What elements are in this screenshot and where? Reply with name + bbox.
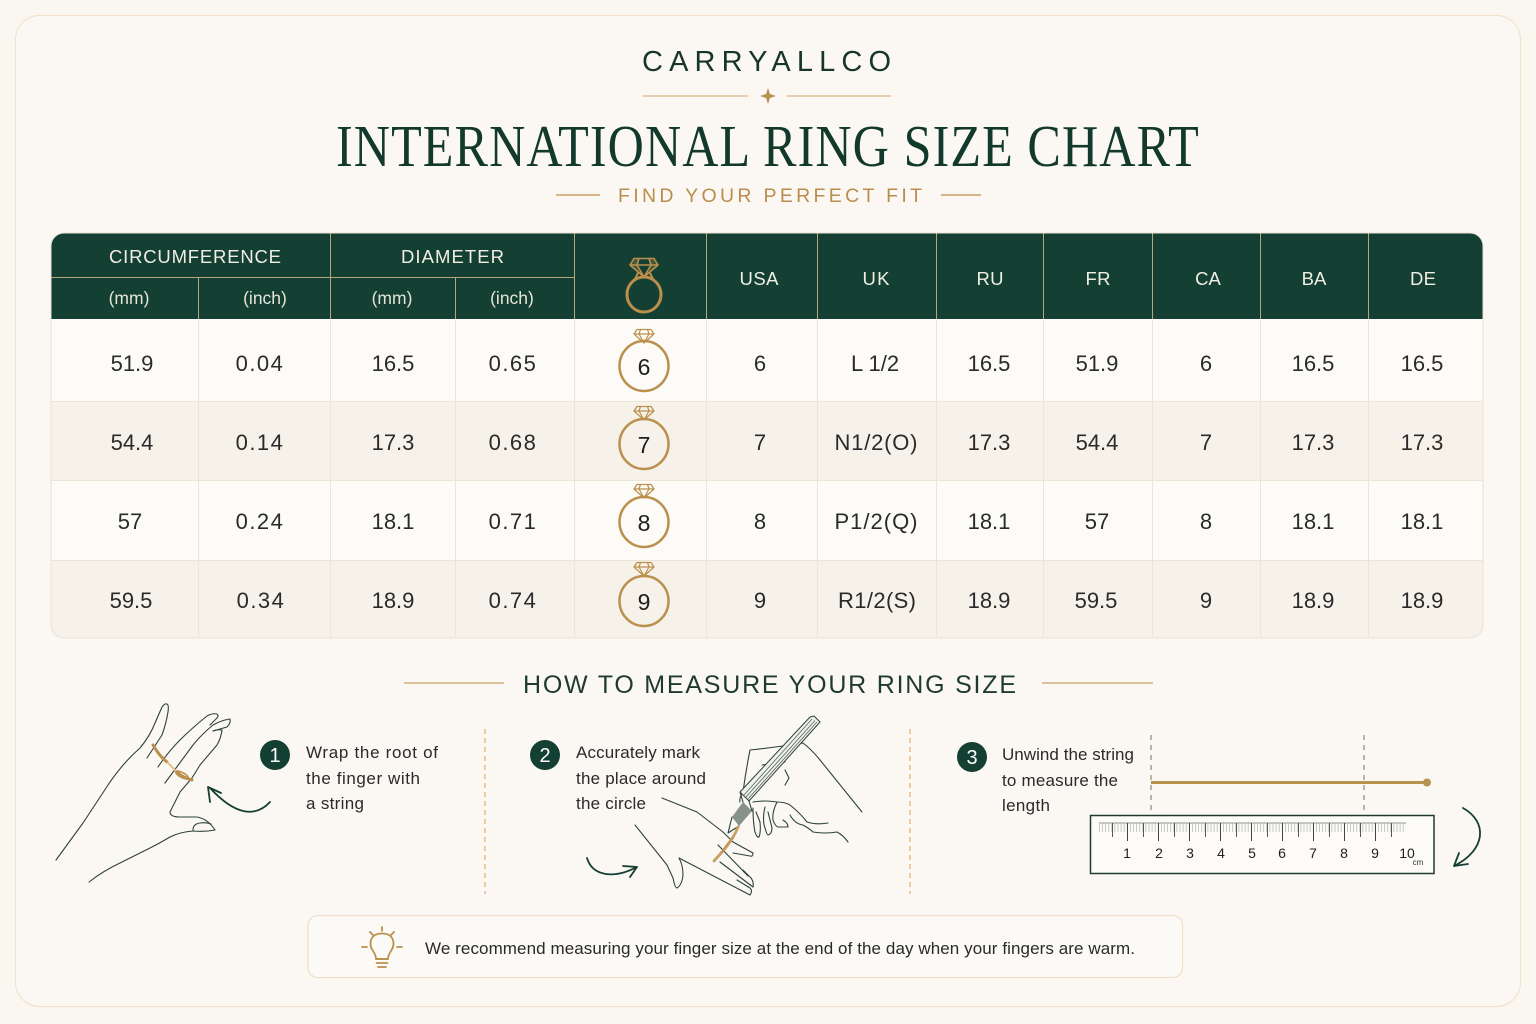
row: size 9: 59.5	[110, 588, 152, 613]
row: size 6: 51.9	[111, 351, 153, 376]
row: size 9: 59.5	[1075, 588, 1117, 613]
table header labels	[109, 246, 1436, 308]
icon: ring size 9	[620, 562, 668, 626]
step text 3: length	[1002, 796, 1050, 815]
table header labels: DIAMETER	[401, 246, 504, 267]
unwound string	[1151, 778, 1431, 786]
table header labels: CA	[1195, 268, 1222, 289]
icon: ring size 7: 7	[638, 432, 650, 458]
step number 1: 1	[269, 745, 281, 767]
row: size 7: 17.3	[968, 430, 1010, 455]
subtitle: FIND YOUR PERFECT FIT	[618, 185, 922, 207]
ruler: 3	[1186, 845, 1194, 861]
arrow: curved down to ruler	[1454, 808, 1480, 866]
arrow: pointing at hand	[587, 858, 637, 877]
ruler: 9	[1371, 845, 1379, 861]
step text 2: the circle	[576, 794, 646, 813]
step 3: measure the length	[957, 735, 1480, 874]
table header labels: BA	[1302, 268, 1327, 289]
step text 1: the finger with	[306, 769, 420, 788]
illustration: hands with pencil	[635, 716, 862, 895]
row: size 8: P1/2(Q)	[834, 509, 918, 534]
step 1: wrap the finger	[56, 704, 438, 882]
row: size 6: 16.5	[372, 351, 414, 376]
step text 3: Unwind the string	[1002, 745, 1134, 764]
icon: ring size 6: 6	[638, 354, 650, 380]
illustration: hand with string	[56, 704, 230, 882]
step number 1	[260, 740, 290, 770]
row: size 6: L 1/2	[851, 351, 899, 376]
divider: step 2 and 3	[909, 729, 911, 894]
row: size 6: 16.5	[1401, 351, 1443, 376]
row: size 8: 18.1	[1401, 509, 1443, 534]
icon: header ring	[627, 258, 661, 312]
row: size 8: 8	[1200, 509, 1212, 534]
step text 2: Accurately mark	[576, 743, 700, 762]
row: size 6: 6	[754, 351, 766, 376]
row: size 9: 0.34	[237, 588, 285, 613]
ruler: cm	[1413, 858, 1424, 867]
row: size 9: 0.74	[489, 588, 537, 613]
icon: ring size 8: 8	[638, 510, 650, 536]
step text 2: the place around	[576, 769, 706, 788]
table header labels: (mm)	[109, 288, 149, 308]
icon: ring size 9: 9	[638, 589, 650, 615]
row: size 6	[111, 330, 1443, 391]
row: size 7: N1/2(O)	[834, 430, 918, 455]
row: size 9: 18.9	[968, 588, 1010, 613]
row: size 9: R1/2(S)	[838, 588, 916, 613]
icon: ring size 6	[620, 330, 668, 391]
row: size 9	[110, 562, 1443, 626]
ruler: 6	[1278, 845, 1286, 861]
row: size 7: 0.14	[236, 430, 284, 455]
step text 1: Wrap the root of	[306, 743, 438, 762]
section heading: how to measure: HOW TO MEASURE YOUR RING SIZE	[523, 671, 1016, 699]
row: size 6: 6	[1200, 351, 1212, 376]
row: size 6: 0.65	[489, 351, 537, 376]
row: size 6: 16.5	[1292, 351, 1334, 376]
row: size 6: 0.04	[236, 351, 284, 376]
table header labels: (inch)	[243, 288, 287, 308]
measurement guides	[1151, 735, 1364, 815]
row: size 9: 18.9	[372, 588, 414, 613]
table header labels: UK	[862, 268, 890, 289]
step number 2: 2	[539, 745, 551, 767]
ruler: 4	[1217, 845, 1225, 861]
row: size 9: 18.9	[1292, 588, 1334, 613]
icon: light bulb	[362, 927, 402, 967]
row: size 9: 9	[754, 588, 766, 613]
title: INTERNATIONAL RING SIZE CHART	[336, 113, 1199, 179]
row: size 8	[118, 484, 1443, 547]
row: size 7: 54.4	[1076, 430, 1118, 455]
row: size 7: 17.3	[1292, 430, 1334, 455]
row: size 8: 18.1	[1292, 509, 1334, 534]
table row backgrounds	[51, 233, 1483, 638]
step number 3: 3	[966, 747, 978, 769]
icon: ring size 8	[620, 484, 668, 547]
row: size 7: 0.68	[489, 430, 537, 455]
divider: step 1 and 2	[484, 729, 486, 894]
ruler: 8	[1340, 845, 1348, 861]
row: size 7: 54.4	[111, 430, 153, 455]
table outline	[51, 233, 1483, 638]
step text 1	[306, 743, 438, 813]
step text 1: a string	[306, 794, 364, 813]
row: size 9: 18.9	[1401, 588, 1443, 613]
table header labels: USA	[740, 268, 779, 289]
ruler: 1	[1123, 845, 1131, 861]
ruler: 5	[1248, 845, 1256, 861]
row: size 7: 17.3	[372, 430, 414, 455]
step number 3	[957, 742, 987, 772]
step text 2	[576, 743, 706, 813]
tip text: We recommend measuring your finger size at the end of the day when your fingers are warm.	[425, 939, 1135, 958]
ruler: 2	[1155, 845, 1163, 861]
table header labels: CIRCUMFERENCE	[109, 246, 281, 267]
row: size 7: 7	[1200, 430, 1212, 455]
brand divider with star	[643, 88, 891, 104]
table header labels: RU	[976, 268, 1004, 289]
row: size 7: 17.3	[1401, 430, 1443, 455]
ruler	[1090, 816, 1434, 874]
table header labels: FR	[1086, 268, 1110, 289]
row: size 8: 0.71	[489, 509, 537, 534]
row: size 8: 8	[754, 509, 766, 534]
ruler: 7	[1309, 845, 1317, 861]
table header labels: (inch)	[490, 288, 534, 308]
row: size 8: 57	[1085, 509, 1109, 534]
row: size 8: 18.1	[968, 509, 1010, 534]
row: size 7	[111, 406, 1443, 469]
row: size 8: 18.1	[372, 509, 414, 534]
ruler: 10	[1399, 845, 1415, 861]
step number 2	[530, 740, 560, 770]
row: size 8: 57	[118, 509, 142, 534]
brand name: CARRYALLCO	[642, 46, 891, 78]
table header labels: (mm)	[372, 288, 412, 308]
arrow: pointing at finger	[208, 787, 270, 812]
step text 3: to measure the	[1002, 771, 1118, 790]
step text 3	[1002, 745, 1134, 815]
row: size 6: 51.9	[1076, 351, 1118, 376]
step 2: mark the string	[530, 716, 862, 895]
row: size 6: 16.5	[968, 351, 1010, 376]
row: size 9: 9	[1200, 588, 1212, 613]
row: size 7: 7	[754, 430, 766, 455]
panel: size table	[51, 233, 1483, 638]
callout: measuring tip	[308, 916, 1182, 978]
table header labels: DE	[1410, 268, 1436, 289]
row: size 8: 0.24	[236, 509, 284, 534]
icon: ring size 7	[620, 406, 668, 469]
